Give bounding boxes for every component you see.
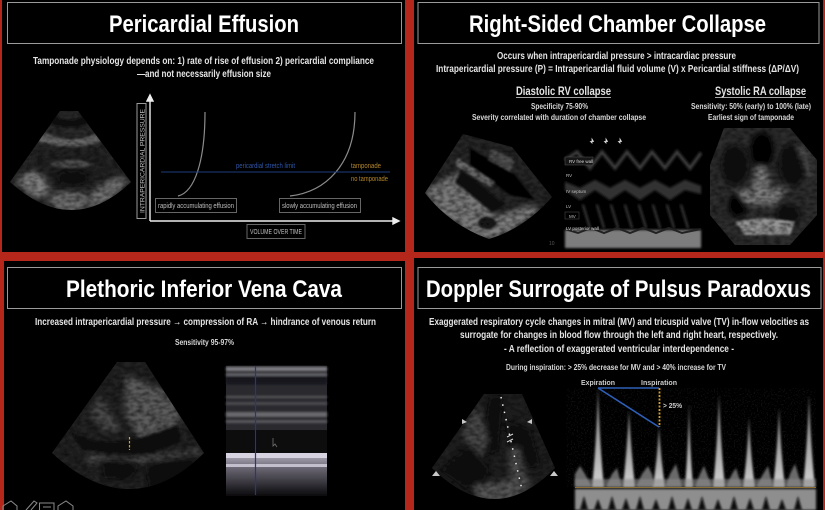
cursor [273,438,277,447]
text: diastolic details [472,102,646,122]
M-mode labels: LV [566,204,571,209]
title: doppler surrogate [418,268,821,308]
text: tamponade physiology: —and not necessarily effusion size [137,68,271,80]
title: plethoric inferior vena cava: Plethoric Inferior Vena Cava [66,276,343,303]
panel: right-sided chamber collapse [414,0,823,252]
text: pressure definition: Occurs when intrapericardial pressure > intracardiac pressure [497,50,736,62]
panel: plethoric inferior vena cava [3,261,405,510]
label: slowly accumulating effusion: slowly accumulating effusion [282,203,357,210]
label: volume over time [247,224,305,238]
chart: M-mode of RV collapse [549,139,701,248]
label: rapidly accumulating effusion [156,198,236,212]
Doppler sample line [501,397,522,490]
label: volume over time: VOLUME OVER TIME [250,229,302,236]
title: right-sided chamber collapse [418,2,819,44]
depth scale number: 10 [549,241,555,247]
diastole arrows [590,139,622,143]
ultrasound: RV collapse sector [425,134,552,239]
label: greater than 25 percent: > 25% [663,403,683,410]
y axis label [137,104,146,218]
title: pericardial effusion [8,2,402,44]
text: mechanism: Increased intrapericardial pressure → compression of RA → hindrance of venous return [35,316,376,328]
text: sensitivity: Sensitivity 95-97% [175,338,234,347]
small inflow lobes [575,464,802,487]
text: systolic details [691,102,811,122]
diffuse base of spectrum [575,479,816,487]
ultrasound: IVC sector [52,362,204,489]
label: inspiration: Inspiration [641,380,677,387]
zero baseline [575,486,816,488]
lower spectrum [575,489,816,510]
curve: slowly accumulating [290,112,355,196]
label: expiration: Expiration [581,380,615,387]
M-mode labels: RV free wall [569,159,593,164]
text: pressure definition [436,50,799,75]
text: tamponade physiology [33,55,374,80]
text: respiratory changes [429,316,809,355]
y axis label: INTRAPERICARDIAL PRESSURE [139,109,146,213]
M-mode labels: LV posterior wall [566,226,599,231]
chart: IVC M-mode [226,366,327,496]
curve: rapidly accumulating [178,112,205,196]
title: plethoric inferior vena cava [8,268,402,308]
y axis with arrow [147,95,153,221]
posterior wall band [565,230,701,248]
M-mode labels: RV [566,173,572,178]
caliper: IVC diameter [128,437,130,450]
icon: slide navigation controls [3,501,73,510]
text: diastolic details: Specificity 75-90% [531,102,588,111]
yellow difference marker [658,388,660,427]
RV free wall trace [565,152,701,168]
chart: Doppler spectral tracing [566,380,816,510]
chart: pressure volume curves [137,95,399,238]
mitral leaflet traces [583,205,688,228]
text: diastolic details: Severity correlated with duration of chamber collapse [472,113,646,122]
heading: diastolic RV collapse: Diastolic RV collapse [516,84,611,98]
text: inspiration criteria: During inspiration: > 25% decrease for MV and > 40% increase for TV [506,363,727,372]
ultrasound: apical Doppler sector [432,394,555,499]
icon: sector markers [432,419,558,476]
sample gate [507,434,513,442]
label: rapidly accumulating effusion: rapidly accumulating effusion [158,203,234,210]
ultrasound: pericardial effusion sector [10,111,131,210]
pericardial stretch limit line: pericardial stretch limit [236,163,295,170]
panel: pericardial effusion [2,0,405,252]
M-mode labels: IV septum [566,189,587,194]
blue reference lines [598,388,659,427]
label: tamponade: tamponade [351,163,381,170]
panel: doppler surrogate of pulsus paradoxus [414,258,823,510]
x axis with arrow [150,218,399,224]
M-mode labels [565,157,599,231]
time marker line [254,366,256,495]
label: no tamponade: no tamponade [351,176,388,183]
velocity peaks [592,388,815,487]
M-mode labels: MV [569,214,576,219]
title: right-sided chamber collapse: Right-Sided Chamber Collapse [469,11,766,38]
septum band [565,180,701,200]
label: slowly accumulating effusion [280,198,360,212]
text: respiratory changes: - A reflection of exaggerated ventricular interdependence - [504,343,734,355]
title: pericardial effusion: Pericardial Effusion [109,11,299,38]
ultrasound: RA collapse apical view [708,126,820,248]
text: systolic details: Earliest sign of tamponade [708,113,794,122]
text: tamponade physiology: Tamponade physiology depends on: 1) rate of rise of effusion 2) pericardial compliance [33,55,374,67]
